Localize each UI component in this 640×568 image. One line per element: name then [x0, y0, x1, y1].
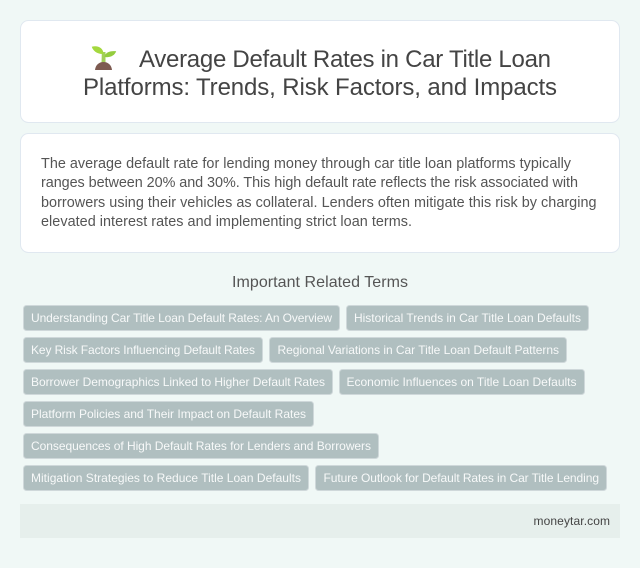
tag: future outlook [316, 466, 606, 490]
heading line 2: Platforms: Trends, Risk Factors, and Impacts [83, 74, 557, 101]
tag: consequences [24, 434, 378, 458]
panel: summary text: elevated interest rates and implementing strict loan terms. [41, 214, 412, 230]
tag: mitigation strategies: Mitigation Strategies to Reduce Title Loan Defaults [31, 471, 301, 485]
tag: regional variations: Regional Variations in Car Title Loan Default Patterns [278, 343, 559, 357]
heading line 1: Average Default Rates in Car Title Loan [139, 46, 551, 73]
tag: economic influences [340, 370, 584, 394]
tag: overview [24, 306, 340, 330]
tag: key risk factors [24, 338, 262, 362]
tag: historical trends: Historical Trends in Car Title Loan Defaults [354, 311, 581, 325]
tag: platform policies: Platform Policies and Their Impact on Default Rates [31, 407, 306, 421]
panel: summary text: ranges between 20% and 30%. This high default rate reflects the risk associated with [41, 175, 578, 191]
tag: future outlook: Future Outlook for Default Rates in Car Title Lending [324, 471, 599, 485]
tag: mitigation strategies [24, 466, 308, 490]
panel: summary text [20, 134, 620, 252]
panel: summary text: The average default rate for lending money through car title loan platforms typically [41, 156, 572, 172]
tag: key risk factors: Key Risk Factors Influencing Default Rates [31, 343, 255, 357]
tag: overview: Understanding Car Title Loan Default Rates: An Overview [31, 311, 332, 325]
panel: summary text: borrowers using their vehicles as collateral. Lenders often mitigate this risk by charging [41, 195, 596, 211]
footer: moneytar.com [534, 514, 610, 528]
panel: title card [20, 20, 620, 122]
tag: platform policies [24, 402, 314, 426]
tag: borrower demographics [24, 370, 332, 394]
footer [20, 504, 620, 538]
tag: historical trends [346, 306, 588, 330]
tag: economic influences: Economic Influences on Title Loan Defaults [346, 375, 576, 389]
tag: consequences: Consequences of High Default Rates for Lenders and Borrowers [31, 439, 371, 453]
tag: regional variations [270, 338, 566, 362]
heading: related terms: Important Related Terms [232, 274, 408, 291]
icon: seedling [92, 46, 116, 70]
tag: borrower demographics: Borrower Demographics Linked to Higher Default Rates [31, 375, 325, 389]
